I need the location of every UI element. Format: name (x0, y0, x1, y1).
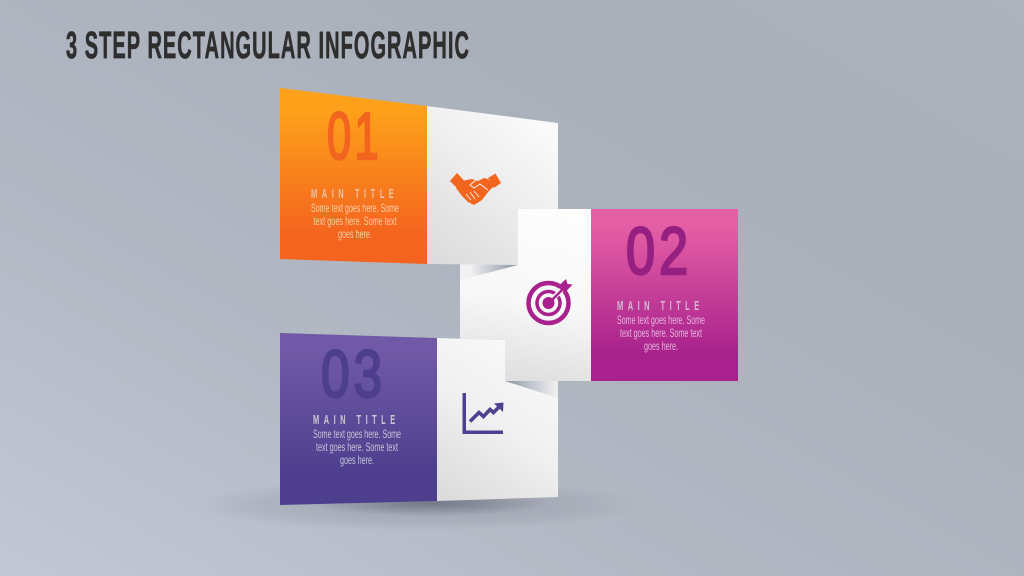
step 2 number: 02 (626, 214, 692, 289)
step 2 white card (460, 209, 591, 381)
step 1 coloured card (280, 88, 427, 264)
step 1 heading: MAIN TITLE (311, 188, 394, 202)
step 3 body text: text goes here. Some text (316, 440, 398, 454)
step 2 coloured card (591, 209, 738, 381)
icon: handshake (450, 173, 501, 205)
step 1 number: 01 (327, 99, 382, 174)
step 1 body text (311, 201, 399, 241)
step 1 body text: Some text goes here. Some (311, 201, 399, 215)
icon: target (528, 279, 572, 323)
panel: step 1 (280, 88, 558, 280)
step 3 body text (313, 427, 401, 467)
step 3 body text: Some text goes here. Some (313, 427, 401, 441)
title: 3 STEP RECTANGULAR INFOGRAPHIC (66, 25, 470, 67)
step 1 body text: goes here. (338, 227, 372, 241)
fold shadow: lower (505, 381, 558, 398)
step 2 body text: text goes here. Some text (620, 326, 702, 340)
step 1 white card (427, 106, 558, 265)
step 1 body text: text goes here. Some text (314, 214, 397, 228)
icon: line chart (462, 393, 504, 434)
panel: step 3 (280, 333, 558, 505)
step 3 white card (437, 338, 558, 501)
floor shadow (195, 479, 645, 531)
step 2 body text: goes here. (644, 339, 678, 353)
panel: step 2 (460, 209, 738, 381)
step 3 heading: MAIN TITLE (313, 414, 395, 428)
step 2 heading: MAIN TITLE (617, 300, 699, 314)
step 2 body text (617, 313, 705, 353)
step 3 coloured card (280, 333, 437, 505)
step 3 number: 03 (321, 337, 386, 412)
step 2 body text: Some text goes here. Some (617, 313, 705, 327)
fold shadow: upper (460, 263, 518, 280)
step 3 body text: goes here. (340, 453, 374, 467)
